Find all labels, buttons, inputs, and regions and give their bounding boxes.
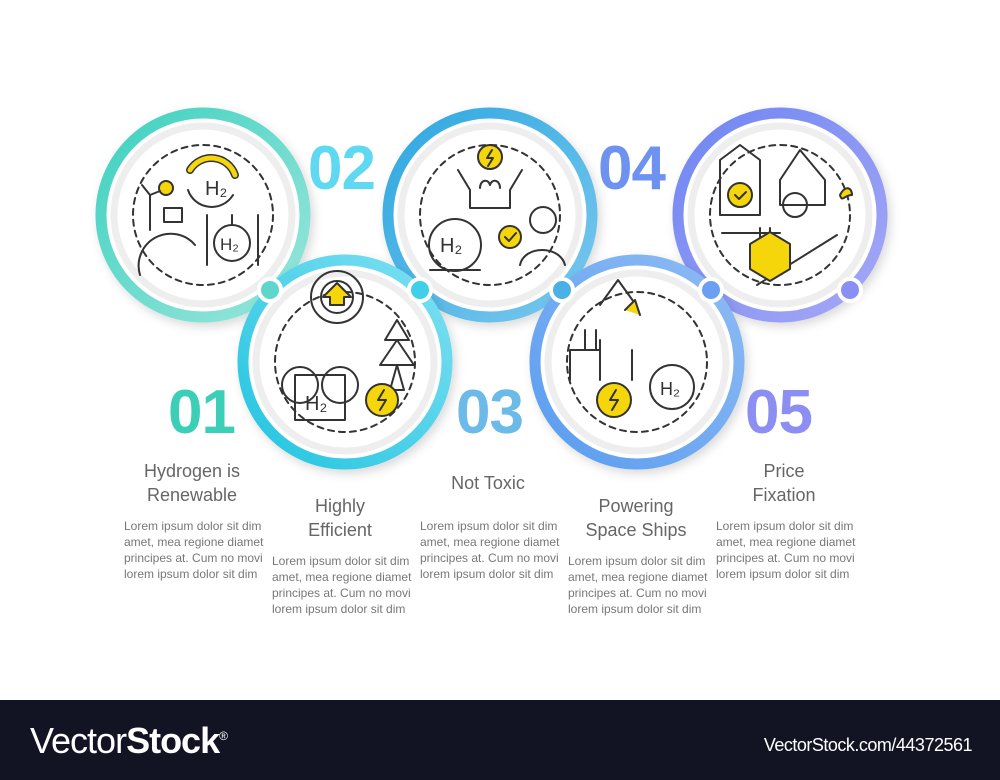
circle 4 xyxy=(535,260,739,464)
title 4 xyxy=(585,496,687,540)
title 1: Renewable xyxy=(147,485,237,505)
title 3: Not Toxic xyxy=(451,473,525,493)
icon 1: H₂ xyxy=(220,235,239,254)
number 02: 02 xyxy=(308,134,375,203)
title 4: Powering xyxy=(598,496,674,516)
icon 4: H₂ xyxy=(660,379,680,399)
title 2 xyxy=(308,496,372,540)
title 5: Fixation xyxy=(752,485,816,505)
number 04: 04 xyxy=(598,134,665,203)
title 5 xyxy=(752,461,816,505)
icon 2 xyxy=(282,271,414,420)
icons xyxy=(133,145,852,432)
icon 3 xyxy=(429,145,565,271)
title 2: Highly xyxy=(315,496,365,516)
text 1: Lorem ipsum dolor sit dim amet, mea regione diamet principes at. Cum no movi lorem ipsum dolor sit dim xyxy=(124,519,263,581)
text 3: Lorem ipsum dolor sit dim amet, mea regione diamet principes at. Cum no movi lorem ipsum dolor sit dim xyxy=(420,519,559,581)
text 2: Lorem ipsum dolor sit dim amet, mea regione diamet principes at. Cum no movi lorem ipsum dolor sit dim xyxy=(272,554,411,616)
icon 4 xyxy=(570,280,694,417)
number 03: 03 xyxy=(456,378,523,447)
icon 5 xyxy=(720,145,852,285)
text 5: Lorem ipsum dolor sit dim amet, mea regione diamet principes at. Cum no movi lorem ipsum dolor sit dim xyxy=(716,519,855,581)
title 5: Price xyxy=(763,461,804,481)
title 2: Efficient xyxy=(308,520,372,540)
footer bar xyxy=(0,700,1000,780)
footer url: VectorStock.com/44372561 xyxy=(764,735,972,755)
number 05: 05 xyxy=(745,378,812,447)
circle 5 xyxy=(678,113,882,317)
text 4: Lorem ipsum dolor sit dim amet, mea regione diamet principes at. Cum no movi lorem ipsum dolor sit dim xyxy=(568,554,707,616)
icon 3: H₂ xyxy=(440,235,462,257)
footer logo: VectorStock® xyxy=(30,720,227,761)
icon 2: H₂ xyxy=(305,393,327,415)
circle 1 xyxy=(101,113,305,317)
icon 1 xyxy=(139,158,258,275)
title 4: Space Ships xyxy=(585,520,687,540)
title 1: Hydrogen is xyxy=(144,461,240,481)
icon 1: H₂ xyxy=(205,178,227,200)
circle 2 xyxy=(243,260,447,464)
circle 3 xyxy=(388,113,592,317)
connector dots xyxy=(259,279,861,301)
title 1 xyxy=(144,461,240,505)
number 01: 01 xyxy=(168,378,235,447)
